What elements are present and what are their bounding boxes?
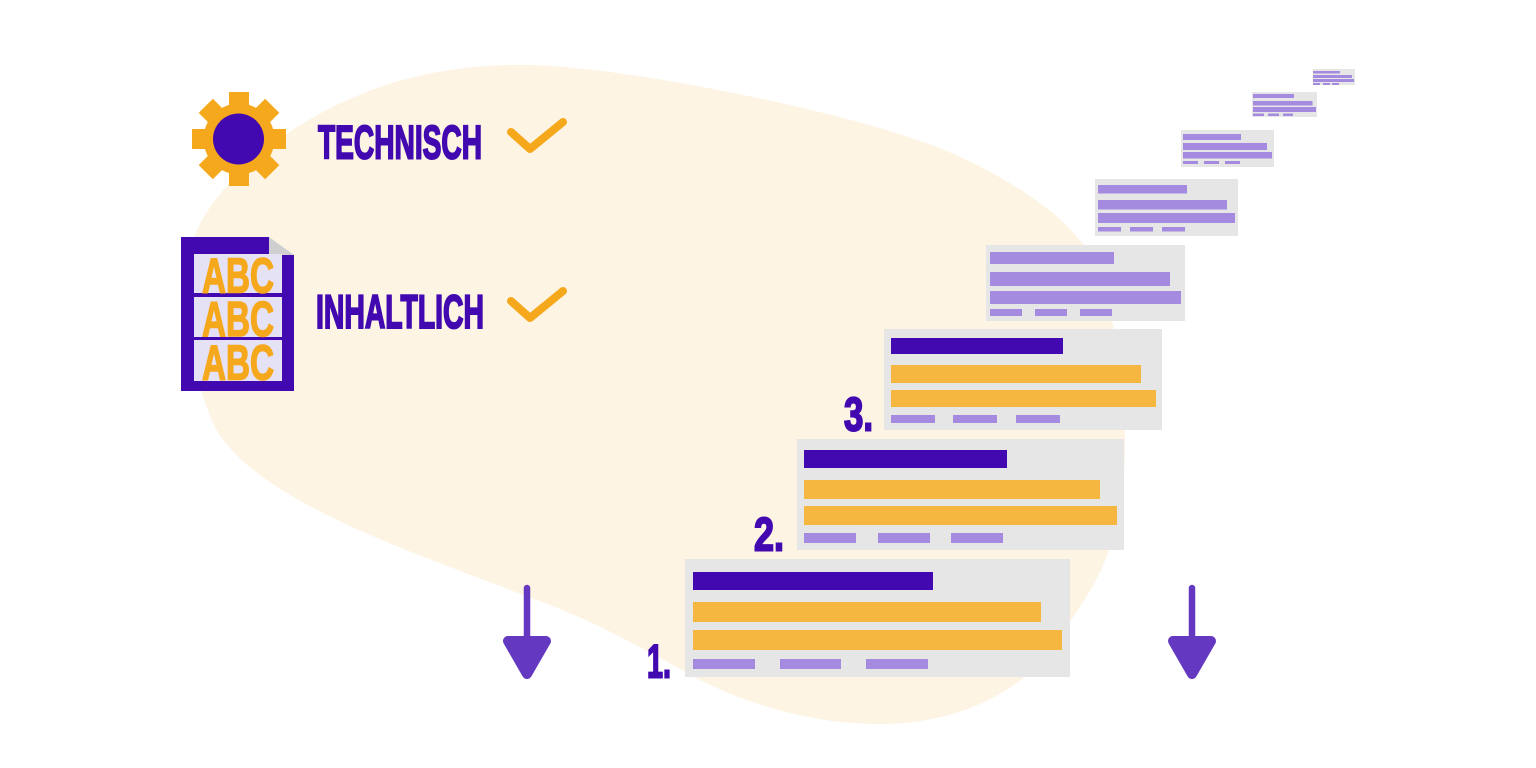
search result card 4 (986, 245, 1185, 321)
search result card 8 (1313, 69, 1355, 85)
search result card 3 (884, 329, 1162, 430)
search result card 5 (1095, 179, 1238, 236)
rank number 3: 3. (844, 388, 873, 440)
rank number 2: 2. (754, 508, 784, 560)
icon: check mark inhaltlich (511, 291, 563, 318)
icon: gear (192, 92, 286, 186)
search result card 2 (797, 439, 1124, 550)
arrow: left down (508, 588, 546, 674)
heading: technisch: TECHNISCH (318, 116, 482, 168)
search result card 7 (1252, 92, 1317, 117)
search result card 1 (685, 559, 1070, 677)
background blob (188, 65, 1125, 724)
icon: document (181, 237, 294, 391)
heading: inhaltlich: INHALTLICH (316, 285, 484, 338)
icon: check mark technisch (511, 122, 563, 149)
icon: document: ABC (202, 336, 274, 390)
icon: document: ABC (202, 293, 274, 347)
rank number 1: 1. (647, 634, 671, 688)
arrow: right down (1173, 588, 1211, 674)
search result card 6 (1181, 130, 1274, 167)
icon: document: ABC (202, 250, 274, 304)
